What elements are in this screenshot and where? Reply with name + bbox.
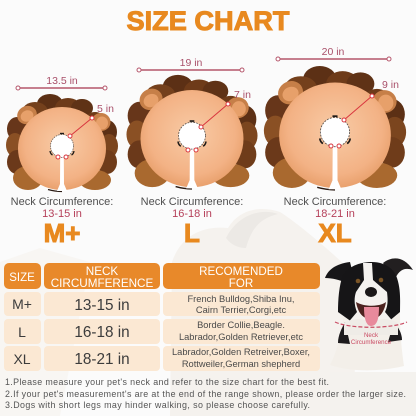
size L: L <box>184 218 200 248</box>
neck range L: 16-18 in <box>172 208 212 220</box>
row XL: Labrador,Golden Retreiver,Boxer, <box>172 347 310 357</box>
notes: 1.Please measure your pet's neck and refer to the size chart for the best fit. <box>5 377 329 387</box>
table header: CIRCUMFERENCE <box>51 277 153 290</box>
depth measure XL <box>329 94 374 148</box>
row L: 16-18 in <box>74 324 130 341</box>
neck label on dog: Neck <box>364 332 379 339</box>
row L <box>4 319 320 344</box>
row L: L <box>18 324 26 340</box>
dog photo <box>325 258 413 370</box>
width measure XL <box>276 57 391 61</box>
neck range M+: 13-15 in <box>42 208 82 220</box>
row XL <box>4 346 320 371</box>
panel: M+ lion <box>6 75 118 248</box>
panel: L lion <box>126 57 258 248</box>
depth measure L <box>186 102 230 152</box>
background watermark bird <box>0 209 416 416</box>
neck text L: Neck Circumference: <box>141 196 243 208</box>
table header: FOR <box>229 277 253 290</box>
table header: RECOMENDED <box>199 265 283 278</box>
row M+: M+ <box>12 296 32 312</box>
size table <box>4 263 320 371</box>
panel: XL lion <box>264 46 406 248</box>
row XL: 18-21 in <box>74 351 130 368</box>
row M+: 13-15 in <box>74 297 130 314</box>
row M+: French Bulldog,Shiba Inu, <box>188 294 294 304</box>
width label M+: 13.5 in <box>46 75 78 87</box>
lion collar M+ <box>6 94 118 192</box>
title: SIZE CHART <box>126 6 290 36</box>
width measure M+ <box>16 86 107 90</box>
width measure L <box>137 68 244 72</box>
row M+: Cairn Terrier,Corgi,etc <box>196 305 286 315</box>
depth label L: 7 in <box>234 89 251 101</box>
depth measure M+ <box>56 116 94 159</box>
notes: 3.Dogs with short legs may hinder walking, so please choose carefully. <box>5 400 310 410</box>
row L: Labrador,Golden Retriever,etc <box>179 332 303 342</box>
lion collar L <box>126 75 258 189</box>
neck range XL: 18-21 in <box>315 208 355 220</box>
neck text XL: Neck Circumference: <box>284 196 386 208</box>
notes <box>5 377 406 410</box>
notes: 2.If your pet's measurement's are at the end of the range shown, please order the larger size. <box>5 389 406 399</box>
lion collar XL <box>264 66 406 190</box>
row L: Border Collie,Beagle. <box>197 320 285 330</box>
width label XL: 20 in <box>322 46 345 58</box>
neck text M+: Neck Circumference: <box>11 196 113 208</box>
depth label M+: 5 in <box>97 103 114 115</box>
width label L: 19 in <box>180 57 203 69</box>
row M+ <box>4 292 320 316</box>
size M+: M+ <box>44 218 80 248</box>
table header: NECK <box>86 265 118 278</box>
table header <box>4 263 320 290</box>
depth label XL: 9 in <box>382 79 399 91</box>
row XL: XL <box>13 351 31 367</box>
circumference label on dog: Circumference <box>351 339 392 346</box>
size XL: XL <box>318 218 352 248</box>
row XL: Rottweiler,German shepherd <box>182 359 300 369</box>
table header: SIZE <box>9 272 35 284</box>
